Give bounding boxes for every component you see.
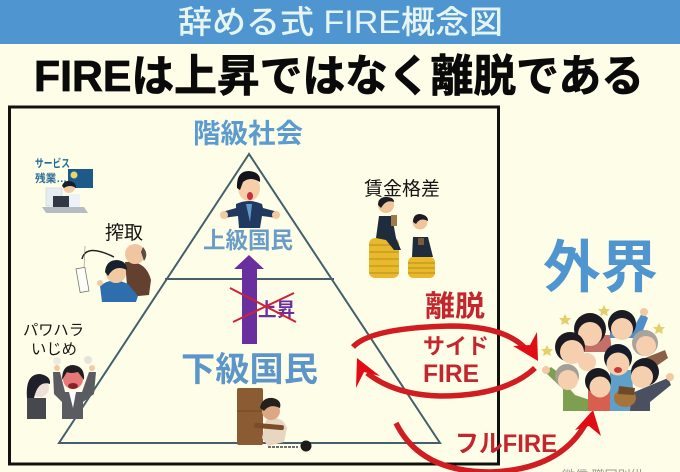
icon: unpaid overtime worker bbox=[35, 156, 93, 213]
label: power harassment, bullying: いじめ bbox=[31, 341, 77, 358]
header band: 辞める式 FIRE概念図 bbox=[178, 4, 503, 40]
label: rise crossed out: 上昇 bbox=[258, 299, 295, 321]
pyramid bbox=[59, 154, 440, 443]
label: exploitation: 搾取 bbox=[105, 222, 143, 244]
icon: upper class man bbox=[220, 171, 280, 228]
heading: outside world: 外界 bbox=[543, 236, 658, 300]
icon: boss fishing from boy's back bbox=[76, 244, 151, 302]
label: power harassment, bullying: パワハラ bbox=[23, 322, 84, 339]
label: wage gap: 賃金格差 bbox=[364, 178, 440, 200]
label: side FIRE bbox=[423, 334, 489, 388]
icon: unpaid overtime worker: 残業… bbox=[35, 171, 67, 185]
main heading: FIREは上昇ではなく離脱である bbox=[34, 52, 644, 101]
label: full FIRE: フルFIRE bbox=[455, 430, 557, 458]
icon: bullying office workers bbox=[27, 356, 96, 419]
arrow: purple upward bbox=[234, 255, 264, 344]
arrow: back from outside world bbox=[356, 358, 535, 396]
label: lower class citizens: 下級国民 bbox=[181, 351, 318, 389]
label: side FIRE: FIRE bbox=[423, 360, 479, 388]
label: breakaway: 離脱 bbox=[425, 290, 485, 323]
icon: cheering crowd bbox=[541, 305, 674, 411]
icon: wage gap coins and men bbox=[369, 197, 435, 278]
label: side FIRE: サイド bbox=[423, 334, 489, 359]
label: upper class citizens: 上級国民 bbox=[203, 227, 293, 253]
icon: prisoner pushing mill bbox=[237, 388, 312, 452]
heading: class society: 階級社会 bbox=[193, 119, 303, 149]
panel: hierarchical society frame bbox=[10, 107, 498, 464]
label: rise crossed out bbox=[230, 288, 296, 322]
icon: unpaid overtime worker: サービス bbox=[35, 156, 70, 170]
arrow: full FIRE bbox=[396, 410, 601, 472]
header band bbox=[0, 0, 680, 44]
label: power harassment, bullying bbox=[23, 322, 84, 358]
arrow: to outside world bbox=[353, 326, 538, 361]
